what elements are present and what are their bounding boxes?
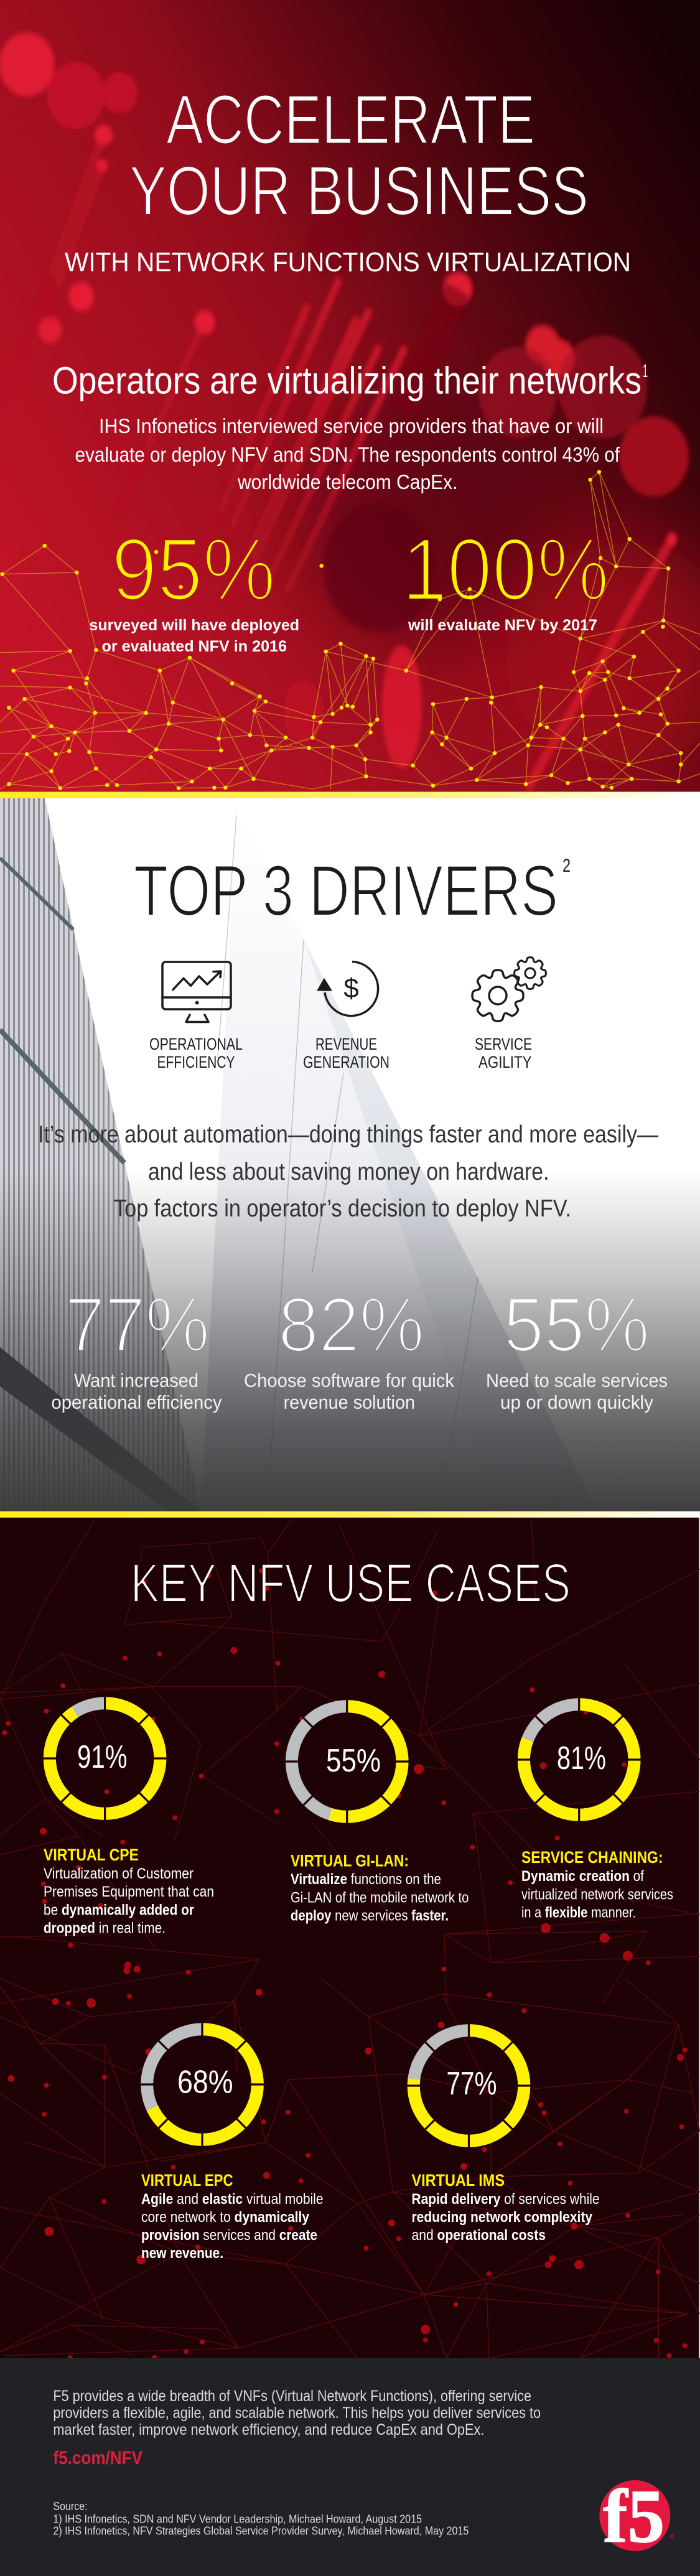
use case: virtual CPE: dropped in real time. [44, 1920, 166, 1936]
use case: virtual Gi-LAN: deploy new services faster. [291, 1908, 449, 1925]
use case: virtual Gi-LAN: Gi-LAN of the mobile network to [291, 1889, 469, 1906]
heading: key NFV use cases: KEY NFV USE CASES [131, 1553, 571, 1613]
donut: 77% [406, 2023, 531, 2149]
icon label: operational efficiency [149, 1035, 243, 1071]
use case: service chaining: SERVICE CHAINING: [521, 1848, 663, 1867]
intro text: IHS Infonetics interviewed service providers that have or will [99, 414, 604, 437]
sources [53, 2499, 469, 2537]
logo: f5: f5 [603, 2475, 665, 2559]
stat: 95%: or evaluated NFV in 2016 [102, 638, 287, 655]
use case: virtual EPC: core network to dynamically [141, 2209, 309, 2226]
icon: dollar cycle arrow [317, 962, 378, 1016]
icon label: service agility: AGILITY [478, 1053, 531, 1071]
closing statement: market faster, improve network efficiency, and reduce CapEx and OpEx. [53, 2421, 484, 2438]
donut: 81%: 81% [557, 1740, 606, 1776]
donut: 77%: 77% [447, 2066, 497, 2102]
stat: 82%: 82% [278, 1282, 424, 1368]
panel: hero [0, 0, 700, 792]
use case: virtual IMS: reducing network complexity [412, 2209, 592, 2226]
use case: virtual IMS: Rapid delivery of services while [412, 2191, 600, 2208]
donut: 55% [284, 1699, 410, 1824]
use case: virtual EPC: Agile and elastic virtual mobile [141, 2191, 324, 2208]
paragraph: automation [38, 1121, 658, 1222]
panel: hero: 1 [643, 361, 648, 381]
use case: service chaining [521, 1848, 673, 1921]
subtitle: WITH NETWORK FUNCTIONS VIRTUALIZATION [65, 247, 631, 278]
stat: 100%: 100% [402, 520, 609, 619]
donut: 68%: 68% [177, 2065, 233, 2101]
use case: virtual CPE: VIRTUAL CPE [44, 1846, 139, 1864]
stat: 82%: Choose software for quick [244, 1370, 454, 1391]
icon label: service agility [475, 1035, 532, 1071]
donut: 91% [42, 1696, 168, 1821]
use case: virtual EPC [141, 2171, 324, 2262]
stat: 77% [51, 1282, 222, 1413]
icon: gears [472, 958, 546, 1021]
use case: service chaining: Dynamic creation of [521, 1868, 644, 1885]
use case: virtual IMS: VIRTUAL IMS [412, 2171, 505, 2190]
use case: virtual Gi-LAN: Virtualize functions on the [291, 1871, 441, 1888]
link: f5.com/NFV [53, 2448, 142, 2468]
heading: top 3 drivers: TOP 3 DRIVERS [134, 851, 558, 931]
use case: virtual EPC: VIRTUAL EPC [141, 2171, 233, 2190]
donut: 55%: 55% [326, 1743, 381, 1779]
stat: 95%: 95% [111, 520, 276, 619]
stat: 55%: Need to scale services [486, 1370, 668, 1391]
icon label: revenue generation: GENERATION [303, 1053, 390, 1071]
donut: 81% [516, 1697, 642, 1822]
stat: 95%: surveyed will have deployed [90, 617, 299, 634]
use case: virtual CPE [44, 1846, 214, 1936]
use case: virtual Gi-LAN: VIRTUAL GI-LAN: [291, 1851, 409, 1870]
stat: 95% [90, 520, 299, 655]
icon label: operational efficiency: OPERATIONAL [149, 1035, 243, 1053]
icon label: revenue generation: REVENUE [315, 1035, 377, 1053]
stat: 55%: up or down quickly [500, 1391, 653, 1413]
use case: virtual Gi-LAN [291, 1851, 469, 1925]
donut: 68% [139, 2022, 265, 2147]
sources: 2) IHS Infonetics, NFV Strategies Global Service Provider Survey, Michael Howard, May 2015 [53, 2524, 469, 2537]
intro text: evaluate or deploy NFV and SDN. The respondents control 43% of [75, 443, 620, 466]
title: ACCELERATE [166, 81, 535, 158]
intro text: worldwide telecom CapEx. [237, 470, 458, 493]
panel: footer [0, 2358, 700, 2576]
icon: monitor with rising chart [162, 962, 231, 1022]
stat: 100%: will evaluate NFV by 2017 [408, 617, 597, 634]
paragraph: automation: and less about saving money on hardware. [148, 1159, 549, 1185]
logo: f5: ® [670, 2534, 675, 2541]
use case: virtual EPC: provision services and create [141, 2227, 317, 2244]
use case: virtual IMS: and operational costs [412, 2227, 546, 2244]
icon: dollar cycle arrow: $ [343, 973, 359, 1004]
icon label: service agility: SERVICE [475, 1035, 532, 1053]
use case: virtual IMS [412, 2171, 600, 2244]
paragraph: automation: Top factors in operator’s decision to deploy NFV. [114, 1195, 571, 1222]
title [129, 81, 589, 230]
stat: 77%: 77% [65, 1282, 210, 1368]
stat: 82%: revenue solution [284, 1391, 415, 1413]
stat: 82% [244, 1282, 454, 1413]
use case: virtual CPE: Premises Equipment that can [44, 1883, 214, 1900]
stat: 55% [486, 1282, 668, 1413]
stat: 55%: 55% [503, 1282, 650, 1368]
title: YOUR BUSINESS [129, 152, 589, 230]
closing statement: F5 provides a wide breadth of VNFs (Virtual Network Functions), offering service [53, 2387, 531, 2405]
footnote marker 2: 2 [562, 856, 571, 876]
closing statement [53, 2387, 541, 2438]
use case: virtual CPE: be dynamically added or [44, 1902, 194, 1918]
intro text [75, 414, 620, 493]
closing statement: providers a flexible, agile, and scalable network. This helps you deliver services to [53, 2404, 541, 2422]
use case: virtual EPC: new revenue. [141, 2245, 223, 2262]
stat: 77%: Want increased [74, 1370, 198, 1391]
panel: top 3 drivers [0, 798, 700, 1511]
panel: key NFV use cases [0, 1518, 700, 2358]
icon label: operational efficiency: EFFICIENCY [157, 1053, 235, 1071]
use case: service chaining: in a flexible manner. [521, 1904, 636, 1921]
use case: virtual CPE: Virtualization of Customer [44, 1865, 194, 1882]
sources: 1) IHS Infonetics, SDN and NFV Vendor Leadership, Michael Howard, August 2015 [53, 2513, 422, 2525]
network graphic [0, 472, 700, 789]
stat: 77%: operational efficiency [51, 1391, 222, 1413]
sources: Source: [53, 2499, 88, 2513]
icon label: revenue generation [303, 1035, 390, 1071]
donut: 91%: 91% [77, 1739, 128, 1775]
